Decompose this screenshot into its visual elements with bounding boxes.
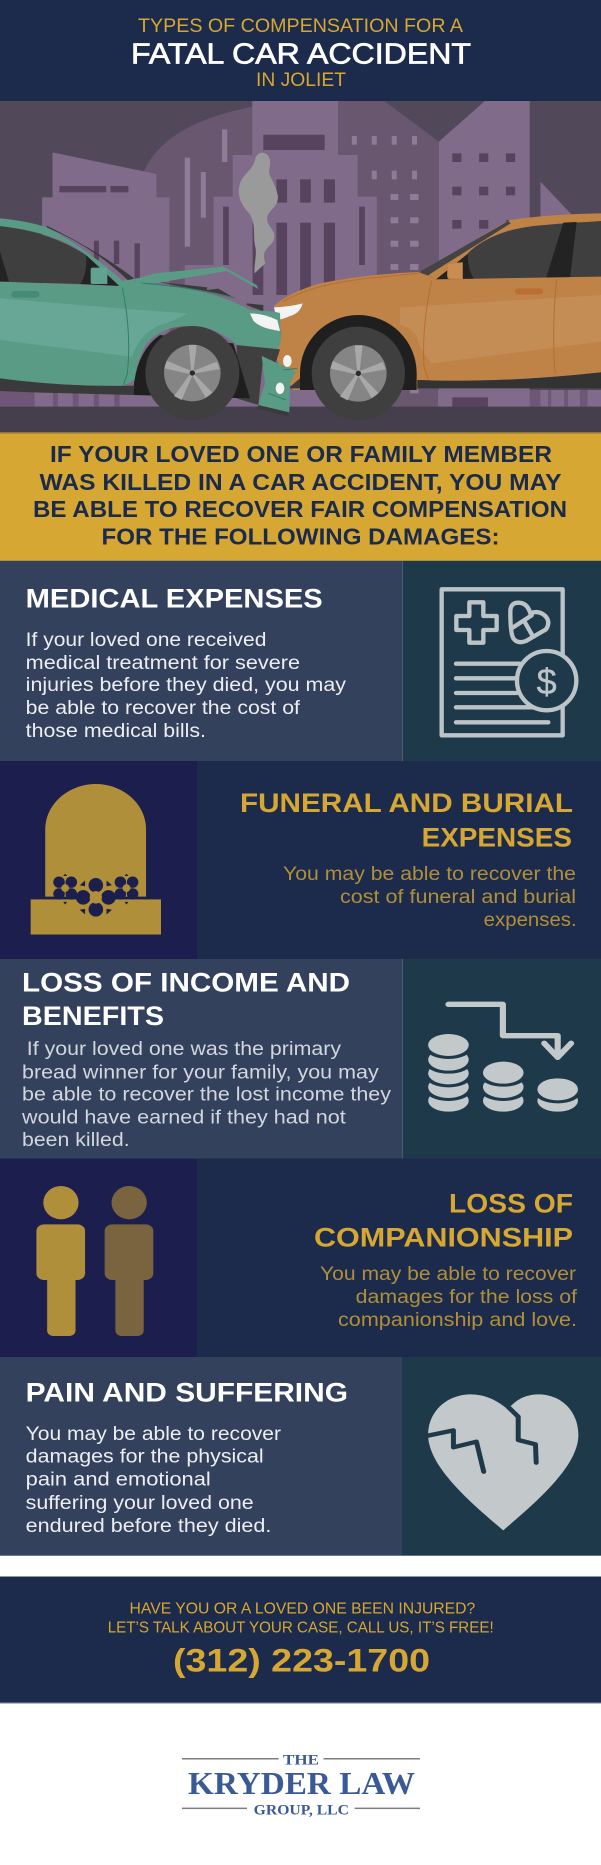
title line: in joliet: IN JOLIET (256, 70, 346, 91)
icon: medical bill with dollar coin (442, 589, 576, 735)
orange car door handle (515, 288, 543, 294)
orange car wheel (288, 315, 417, 420)
panel: pain and suffering (0, 1357, 601, 1556)
body text: pain and suffering: endured before they died. (26, 1516, 271, 1537)
green car (0, 218, 297, 420)
green car wheel (0, 326, 250, 420)
panel: loss of income and benefits (0, 959, 601, 1158)
heading: loss of income and benefits (22, 968, 350, 1031)
logo text: group llc: GROUP, LLC (254, 1802, 349, 1818)
body text: funeral and burial (283, 864, 577, 931)
body text: loss of income (21, 1039, 392, 1151)
icon: tombstone with flowers (31, 784, 161, 935)
heading: loss of income and benefits: BENEFITS (22, 1001, 164, 1031)
heading: medical expenses: MEDICAL EXPENSES (26, 584, 323, 614)
heading: funeral and burial expenses: EXPENSES (422, 823, 572, 853)
smoke (239, 153, 278, 273)
body text: medical expenses: those medical bills. (26, 721, 206, 742)
intro line 3: BE ABLE TO RECOVER FAIR COMPENSATION (33, 496, 567, 522)
illustration: car crash in front of city skyline (0, 101, 601, 433)
intro line 2: WAS KILLED IN A CAR ACCIDENT, YOU MAY (40, 469, 562, 495)
green car door handle (11, 291, 39, 298)
heading: loss of companionship (314, 1189, 573, 1253)
body text: medical expenses: If your loved one received (26, 630, 266, 651)
body text: loss of income: been killed. (22, 1130, 130, 1151)
heading: pain and suffering: PAIN AND SUFFERING (26, 1378, 348, 1408)
heading: funeral and burial expenses (240, 788, 573, 853)
header banner (0, 0, 601, 101)
call to action text line 2: LET’S TALK ABOUT YOUR CASE, CALL US, IT’S FREE! (108, 1620, 494, 1637)
lifted hood (135, 267, 258, 289)
body text: pain and suffering: suffering your loved one (26, 1493, 254, 1514)
icon: declining coin stacks with arrow (425, 1004, 581, 1112)
body text: loss of companionship: companionship and love. (338, 1310, 577, 1331)
orange car mirror (447, 262, 463, 279)
body text: medical expenses: injuries before they died, you may (26, 675, 347, 696)
call to action band (0, 1576, 601, 1703)
orange car (274, 213, 601, 420)
heading: loss of companionship: COMPANIONSHIP (314, 1223, 573, 1253)
panel: medical expenses (0, 561, 601, 761)
intro line 4: FOR THE FOLLOWING DAMAGES: (102, 524, 500, 550)
skyline and street (0, 101, 601, 433)
heading: funeral and burial expenses: FUNERAL AND BURIAL (240, 788, 573, 818)
logo text: kryder law: KRYDER LAW (188, 1765, 415, 1801)
green car headlight (250, 313, 280, 331)
body text: funeral and burial: expenses. (484, 910, 577, 931)
intro line 1: IF YOUR LOVED ONE OR FAMILY MEMBER (50, 441, 552, 467)
body text: pain and suffering: pain and emotional (26, 1470, 211, 1491)
green car front bumper shadow (237, 345, 280, 405)
heading: loss of companionship: LOSS OF (449, 1189, 573, 1219)
title line: fatal car accident: FATAL CAR ACCIDENT (131, 38, 471, 70)
body text: medical expenses (26, 630, 347, 742)
green car mirror (91, 268, 107, 284)
panel: loss of companionship (0, 1158, 601, 1357)
icon: broken heart (428, 1394, 578, 1530)
body text: loss of income: be able to recover the lost income they (22, 1084, 392, 1106)
logo: the kryder law group (182, 1752, 420, 1818)
body text: pain and suffering: You may be able to recover (26, 1424, 282, 1445)
body text: loss of companionship: damages for the loss of (356, 1287, 578, 1308)
logo text: the: THE (283, 1752, 319, 1768)
green car detached bumper (257, 356, 297, 416)
body text: pain and suffering: damages for the physical (26, 1447, 264, 1468)
body text: pain and suffering (26, 1424, 282, 1537)
intro gold banner (0, 432, 601, 562)
heading: loss of income and benefits: LOSS OF INCOME AND (22, 968, 350, 998)
body text: funeral and burial: cost of funeral and burial (340, 887, 576, 908)
body text: loss of income: would have earned if they had not (21, 1107, 347, 1128)
orange car headlight (274, 303, 303, 319)
body text: loss of income: bread winner for your family, you may (22, 1062, 379, 1083)
body text: medical expenses: be able to recover the cost of (26, 698, 301, 719)
body text: loss of income: If your loved one was the primary (27, 1039, 342, 1060)
body text: medical expenses: medical treatment for severe (26, 653, 300, 674)
phone number: (312) 223-1700 (173, 1643, 430, 1679)
title line: types of compensation: TYPES OF COMPENSATION FOR A (138, 16, 463, 37)
body text: loss of companionship (320, 1264, 578, 1331)
call to action text line 1: HAVE YOU OR A LOVED ONE BEEN INJURED? (130, 1600, 475, 1617)
icon: medical bill with dollar coin: $ (537, 661, 557, 702)
body text: loss of companionship: You may be able to recover (320, 1264, 577, 1285)
panel: funeral and burial expenses (0, 761, 601, 959)
body text: funeral and burial: You may be able to recover the (283, 864, 576, 885)
icon: two people (36, 1186, 153, 1336)
